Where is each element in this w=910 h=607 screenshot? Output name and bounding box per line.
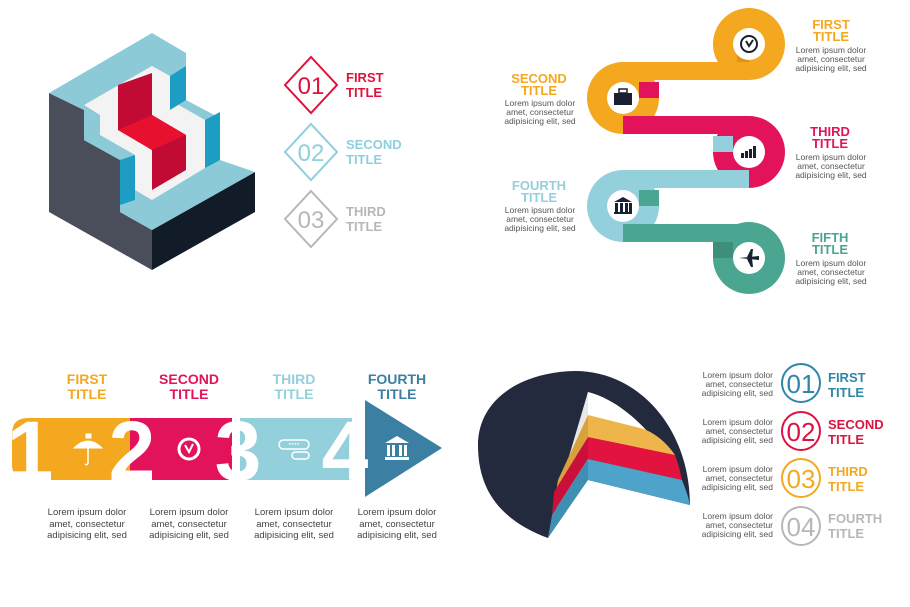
iso: red block xyxy=(118,73,186,190)
step 4 triangle xyxy=(365,400,442,497)
item 03: THIRD xyxy=(346,204,386,219)
item 03: TITLE xyxy=(346,219,382,234)
label fourth: adipisicing elit, sed xyxy=(504,223,576,233)
layer orange xyxy=(588,415,675,456)
label second: TITLE xyxy=(521,83,557,98)
iso: dark left face xyxy=(49,93,152,270)
label second: amet, consectetur xyxy=(506,107,574,117)
label fourth: amet, consectetur xyxy=(506,214,574,224)
item 01: TITLE xyxy=(828,385,864,400)
body texts: amet, consectetur xyxy=(151,519,227,530)
item 01: FIRST xyxy=(346,70,384,85)
step 2 pink xyxy=(130,418,232,480)
item 02 xyxy=(285,124,402,180)
iso: white track xyxy=(84,66,205,200)
body texts: Lorem ipsum dolor xyxy=(150,507,228,518)
item 01: Lorem ipsum dolor xyxy=(703,370,773,380)
titles: FOURTH xyxy=(368,371,426,387)
iso: black right face xyxy=(152,172,255,270)
label second: adipisicing elit, sed xyxy=(504,116,576,126)
item 01 xyxy=(702,364,866,402)
item 04: TITLE xyxy=(828,526,864,541)
label first: amet, consectetur xyxy=(797,54,865,64)
item 01 xyxy=(285,57,384,113)
item 01: adipisicing elit, sed xyxy=(702,388,773,398)
icon: clock xyxy=(179,439,199,459)
titles: FIRST xyxy=(67,371,108,387)
item 02: SECOND xyxy=(346,137,402,152)
item 03 xyxy=(285,191,386,247)
titles: TITLE xyxy=(68,386,106,402)
body texts: Lorem ipsum dolor xyxy=(358,507,436,518)
icon: clock xyxy=(741,36,757,52)
titles: TITLE xyxy=(170,386,208,402)
label fourth xyxy=(504,178,576,233)
label fifth: adipisicing elit, sed xyxy=(795,276,867,286)
icon: plane xyxy=(739,249,759,267)
item 04: 04 xyxy=(787,512,815,542)
item 03: THIRD xyxy=(828,464,868,479)
step 3 light blue xyxy=(240,418,352,480)
step 1 orange xyxy=(12,418,140,480)
big numerals: 2 xyxy=(109,404,155,498)
item 03: Lorem ipsum dolor xyxy=(703,464,773,474)
titles: SECOND xyxy=(159,371,219,387)
item 03: TITLE xyxy=(828,479,864,494)
item 04: adipisicing elit, sed xyxy=(702,529,773,539)
icon: password: **** xyxy=(289,442,300,450)
layer white xyxy=(588,392,670,460)
item 02 xyxy=(702,412,884,450)
body texts: adipisicing elit, sed xyxy=(47,530,127,541)
body texts: adipisicing elit, sed xyxy=(254,530,334,541)
label first: FIRST xyxy=(812,17,850,32)
label third: amet, consectetur xyxy=(797,161,865,171)
big numerals xyxy=(7,404,369,498)
item 02: 02 xyxy=(298,140,324,167)
item 04: Lorem ipsum dolor xyxy=(703,511,773,521)
label second xyxy=(504,71,576,126)
body texts: adipisicing elit, sed xyxy=(149,530,229,541)
label fifth: amet, consectetur xyxy=(797,267,865,277)
dome dark xyxy=(478,371,690,538)
label second: Lorem ipsum dolor xyxy=(505,98,575,108)
icon: password xyxy=(279,440,309,459)
body texts: Lorem ipsum dolor xyxy=(48,507,126,518)
label fourth: TITLE xyxy=(521,190,557,205)
label fifth: TITLE xyxy=(812,242,848,257)
label first: Lorem ipsum dolor xyxy=(796,45,866,55)
iso: blue inner walls xyxy=(170,66,186,110)
icon: bank xyxy=(614,197,632,214)
panel: snake timeline xyxy=(587,8,785,294)
item 03: adipisicing elit, sed xyxy=(702,482,773,492)
layer blue xyxy=(588,459,690,505)
body texts: amet, consectetur xyxy=(359,519,435,530)
label third: Lorem ipsum dolor xyxy=(796,152,866,162)
icon: briefcase xyxy=(614,89,632,105)
item 03 xyxy=(702,459,868,497)
label fifth xyxy=(795,230,867,286)
item 02: SECOND xyxy=(828,417,884,432)
label fifth: FIFTH xyxy=(812,230,848,245)
item 01: amet, consectetur xyxy=(705,379,773,389)
item 04: FOURTH xyxy=(828,511,882,526)
label fourth: FOURTH xyxy=(512,178,566,193)
label second: SECOND xyxy=(511,71,567,86)
item 03: amet, consectetur xyxy=(705,473,773,483)
big numerals: 1 xyxy=(7,404,53,498)
titles xyxy=(67,371,426,402)
layer red xyxy=(588,437,682,480)
panel: puzzle steps xyxy=(7,371,442,541)
big numerals: 3 xyxy=(215,404,261,498)
list: top-left titles xyxy=(285,57,402,247)
panel: layered dome xyxy=(478,371,690,538)
body texts: adipisicing elit, sed xyxy=(357,530,437,541)
titles: THIRD xyxy=(273,371,315,387)
panel: isometric stairs xyxy=(49,33,255,270)
item 03: 03 xyxy=(298,207,324,234)
titles: TITLE xyxy=(378,386,416,402)
label first xyxy=(795,17,867,73)
titles: TITLE xyxy=(275,386,313,402)
item 02: TITLE xyxy=(346,152,382,167)
item 01: 01 xyxy=(787,369,815,399)
band: pink xyxy=(623,82,785,188)
label first: TITLE xyxy=(813,29,849,44)
iso: light blue top xyxy=(49,33,255,230)
label third: THIRD xyxy=(810,124,850,139)
item 02: 02 xyxy=(787,417,815,447)
body texts xyxy=(47,507,437,541)
item 04: amet, consectetur xyxy=(705,520,773,530)
list: numbered circles xyxy=(702,364,884,545)
band: light blue xyxy=(587,136,749,242)
label fifth: Lorem ipsum dolor xyxy=(796,258,866,268)
label third xyxy=(795,124,867,180)
snake labels xyxy=(504,17,867,286)
item 04 xyxy=(702,507,882,545)
item 01: TITLE xyxy=(346,85,382,100)
icon circles xyxy=(607,28,765,274)
item 02: Lorem ipsum dolor xyxy=(703,417,773,427)
item 02: adipisicing elit, sed xyxy=(702,435,773,445)
item 01: 01 xyxy=(298,73,324,100)
label third: adipisicing elit, sed xyxy=(795,170,867,180)
body texts: amet, consectetur xyxy=(49,519,125,530)
label first: adipisicing elit, sed xyxy=(795,63,867,73)
band: orange xyxy=(587,8,785,134)
label third: TITLE xyxy=(812,136,848,151)
icon: umbrella xyxy=(74,434,102,465)
item 01: FIRST xyxy=(828,370,866,385)
label fourth: Lorem ipsum dolor xyxy=(505,205,575,215)
body texts: Lorem ipsum dolor xyxy=(255,507,333,518)
item 03: 03 xyxy=(787,464,815,494)
icon: chart xyxy=(741,146,756,158)
icon: bank xyxy=(385,436,409,460)
big numerals: 4 xyxy=(322,404,369,498)
item 02: amet, consectetur xyxy=(705,426,773,436)
body texts: amet, consectetur xyxy=(256,519,332,530)
band: teal xyxy=(623,190,785,294)
item 02: TITLE xyxy=(828,432,864,447)
